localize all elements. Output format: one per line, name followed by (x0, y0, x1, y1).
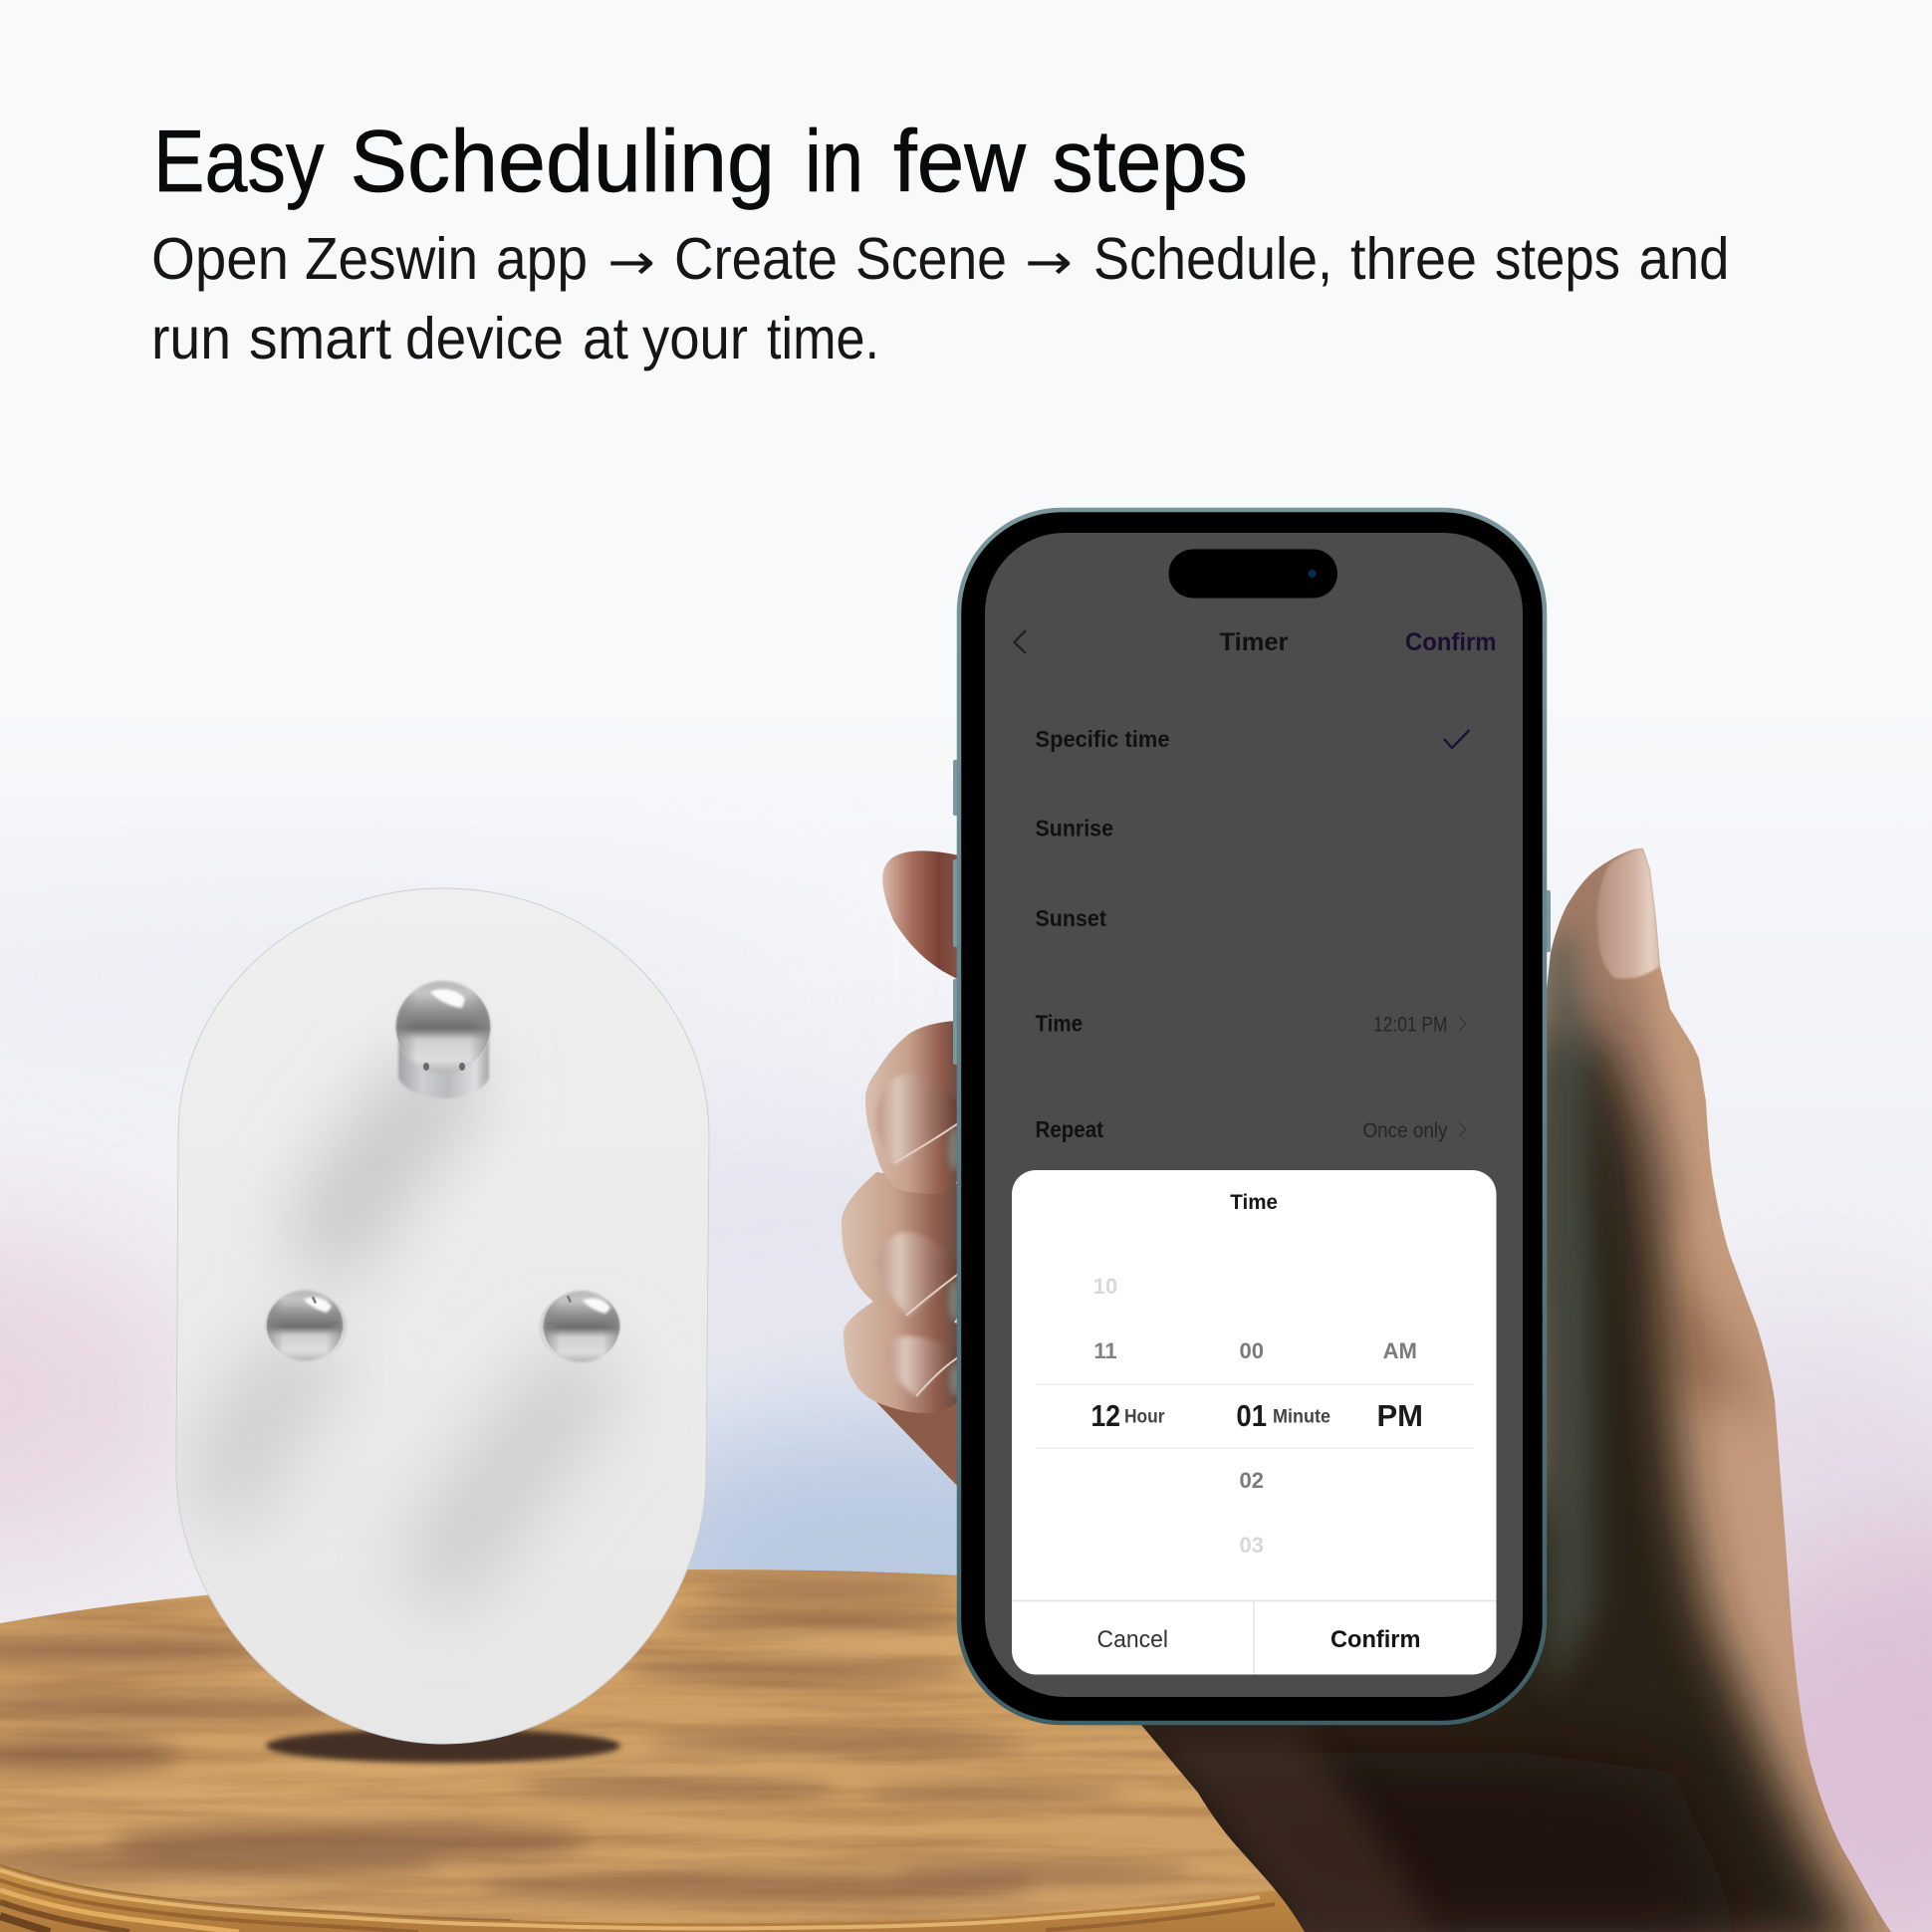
lower palm wedge (876, 1394, 962, 1491)
icon: check mark (1444, 730, 1470, 748)
pin: right (539, 1291, 619, 1362)
minute column: 03 (1239, 1533, 1264, 1558)
finger 2 (865, 1021, 962, 1194)
button: Confirm: Confirm (1330, 1626, 1420, 1653)
subtitle: Open (151, 226, 289, 292)
row: Time: Time (1036, 1010, 1083, 1036)
hour column: 10 (1093, 1274, 1117, 1299)
minute column (1236, 1338, 1330, 1558)
row: Repeat: Once only (1362, 1118, 1448, 1142)
title: steps (1052, 112, 1248, 210)
minute column: 01 (1236, 1398, 1267, 1433)
row: Repeat: Repeat (1036, 1116, 1103, 1142)
subtitle: and (1639, 226, 1729, 292)
side buttons (953, 760, 1551, 1065)
header: Confirm: Confirm (1405, 628, 1496, 656)
back chevron (1014, 630, 1026, 653)
title: Easy (153, 112, 325, 210)
subtitle: your (642, 306, 748, 371)
subtitle: Scene (855, 226, 1007, 292)
header: Timer: Timer (1219, 628, 1289, 656)
finger 3 (842, 1172, 962, 1335)
subtitle: Schedule, (1093, 226, 1332, 292)
subtitle: run (151, 306, 231, 371)
row: Time: 12:01 PM (1373, 1012, 1448, 1036)
hand: palm and thumb (1141, 848, 1891, 1932)
hour column: 12 (1091, 1398, 1120, 1433)
plug body (169, 881, 717, 1753)
subtitle: → (1025, 233, 1073, 291)
hour column: 11 (1093, 1338, 1117, 1363)
phone frame (957, 508, 1547, 1725)
hour column: Hour (1124, 1406, 1165, 1428)
plug shadow on table (266, 1729, 620, 1763)
subtitle: time. (767, 306, 879, 371)
smart plug (169, 881, 717, 1753)
subtitle: app (496, 226, 588, 292)
AM PM column: AM (1383, 1338, 1417, 1363)
title: Scheduling (351, 112, 775, 210)
option: Sunset: Sunset (1036, 905, 1106, 931)
row: Repeat (1036, 1116, 1466, 1142)
button dividers (1012, 1601, 1496, 1675)
option: Specific time: Specific time (1036, 726, 1169, 752)
subtitle: three (1350, 226, 1477, 292)
wooden table (0, 1564, 1394, 1932)
title (153, 112, 1248, 210)
subtitle: Zeswin (305, 226, 478, 292)
smartphone (953, 508, 1551, 1725)
subtitle: smart (249, 306, 391, 371)
modal title: Time (1230, 1191, 1278, 1214)
pin: left (267, 1291, 348, 1360)
selection lines (1036, 1384, 1474, 1448)
minute column: 02 (1239, 1468, 1264, 1493)
subtitle: Create (674, 226, 838, 292)
subtitle: steps (1495, 226, 1620, 292)
time picker modal (1012, 1170, 1496, 1675)
hour column (1091, 1274, 1165, 1433)
hand: fingers (842, 850, 962, 1491)
finger 1 (882, 850, 962, 981)
subtitle: at (583, 306, 628, 371)
subtitle: → (607, 233, 655, 291)
title: in (805, 112, 863, 210)
table edge bands (0, 1865, 1394, 1932)
title: few (893, 112, 1026, 210)
AM PM column: PM (1376, 1398, 1423, 1433)
thumb nail (1597, 848, 1660, 979)
button: Cancel: Cancel (1097, 1626, 1168, 1653)
row: Time (1036, 1010, 1466, 1036)
AM PM column (1376, 1338, 1423, 1433)
screen (985, 533, 1523, 1697)
dynamic island (1169, 550, 1337, 598)
subtitle (151, 226, 1729, 371)
finger 4 (844, 1302, 962, 1413)
minute column: 00 (1239, 1338, 1264, 1363)
minute column: Minute (1273, 1406, 1330, 1428)
pin: top (396, 981, 490, 1098)
subtitle: device (405, 306, 564, 371)
option: Sunrise: Sunrise (1036, 815, 1113, 841)
